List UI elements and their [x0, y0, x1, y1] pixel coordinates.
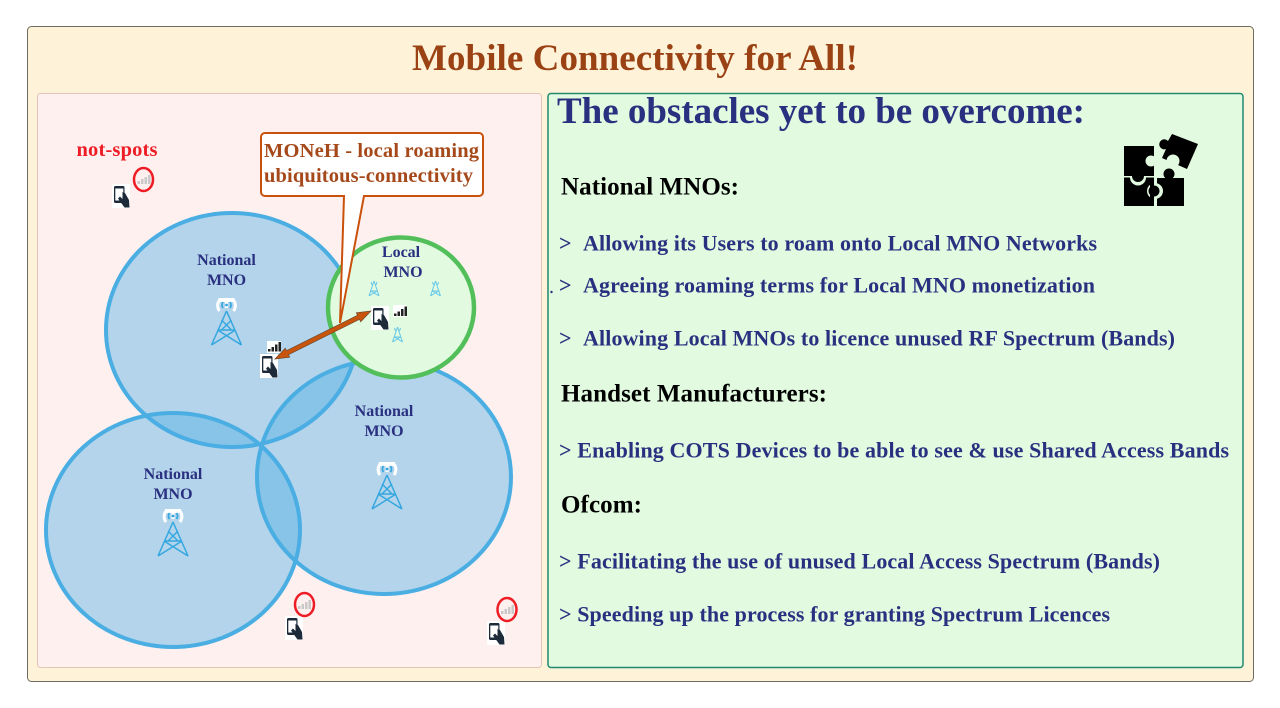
icon: no signal top — [134, 168, 153, 191]
icon: puzzle — [1124, 134, 1198, 206]
icon: tower top — [212, 298, 242, 345]
icon: no signal bottom middle — [295, 593, 314, 616]
section: handset manufacturers: Handset Manufacturers: — [561, 380, 827, 408]
callout: MONeH — [261, 133, 483, 323]
label: national MNO bottom right: National — [355, 403, 413, 420]
panel: network diagram — [38, 94, 542, 668]
icon: no signal bottom right — [498, 598, 516, 621]
icon: phone not-spot top — [112, 184, 130, 208]
national MNO coverage circle top — [106, 213, 358, 447]
icon: signal national — [267, 341, 281, 353]
icon: phone local — [371, 306, 389, 330]
icon: signal local — [393, 305, 407, 317]
list item: Agreeing roaming terms for Local MNO monetization — [583, 272, 1095, 298]
section: national MNOs: National MNOs: — [561, 174, 739, 200]
label: not-spots: not-spots — [76, 139, 158, 161]
list item: > Enabling COTS Devices to be able to see & use Shared Access Bands — [559, 438, 1229, 462]
stray dot — [550, 291, 553, 293]
label: national MNO top: MNO — [207, 272, 246, 289]
local MNO coverage circle — [328, 238, 474, 378]
list item: > — [559, 230, 572, 256]
icon: tower bottom left — [158, 509, 188, 556]
heading: obstacles: The obstacles yet to be overcome: — [557, 91, 1085, 132]
list item: > Speeding up the process for granting Spectrum Licences — [559, 602, 1110, 626]
panel: obstacles — [548, 91, 1243, 668]
label: local MNO: MNO — [383, 264, 423, 281]
list item: > — [559, 272, 572, 298]
callout: MONeH: MONeH - local roaming — [264, 140, 480, 162]
list item: > Facilitating the use of unused Local Access Spectrum (Bands) — [559, 548, 1160, 574]
national MNO coverage circle bottom right — [257, 360, 511, 594]
icon: small tower right — [430, 281, 440, 296]
title: Mobile Connectivity for All! — [412, 38, 858, 79]
list item: Allowing its Users to roam onto Local MNO Networks — [583, 230, 1097, 256]
icon: small tower left — [369, 281, 379, 296]
icon: phone not-spot bottom middle — [285, 616, 303, 640]
national MNO coverage circle bottom left — [46, 413, 300, 647]
obstacles background — [548, 94, 1243, 668]
callout: MONeH: ubiquitous-connectivity — [264, 165, 474, 187]
icon: tower bottom right — [372, 462, 402, 509]
icon: phone national — [260, 354, 278, 378]
label: national MNO bottom right: MNO — [364, 423, 404, 440]
icon: phone not-spot bottom right — [487, 621, 505, 645]
label: national MNO bottom left: National — [144, 466, 202, 483]
list item: Allowing Local MNOs to licence unused RF Spectrum (Bands) — [583, 326, 1175, 350]
list item: > — [559, 326, 572, 350]
section: Ofcom: Ofcom: — [561, 492, 642, 518]
icon: small tower lower — [392, 327, 402, 342]
label: local MNO: Local — [382, 244, 420, 261]
label: national MNO bottom left: MNO — [153, 486, 193, 503]
arrow: roaming link — [275, 311, 371, 359]
label: national MNO top: National — [197, 252, 256, 269]
diagram background — [38, 94, 542, 668]
